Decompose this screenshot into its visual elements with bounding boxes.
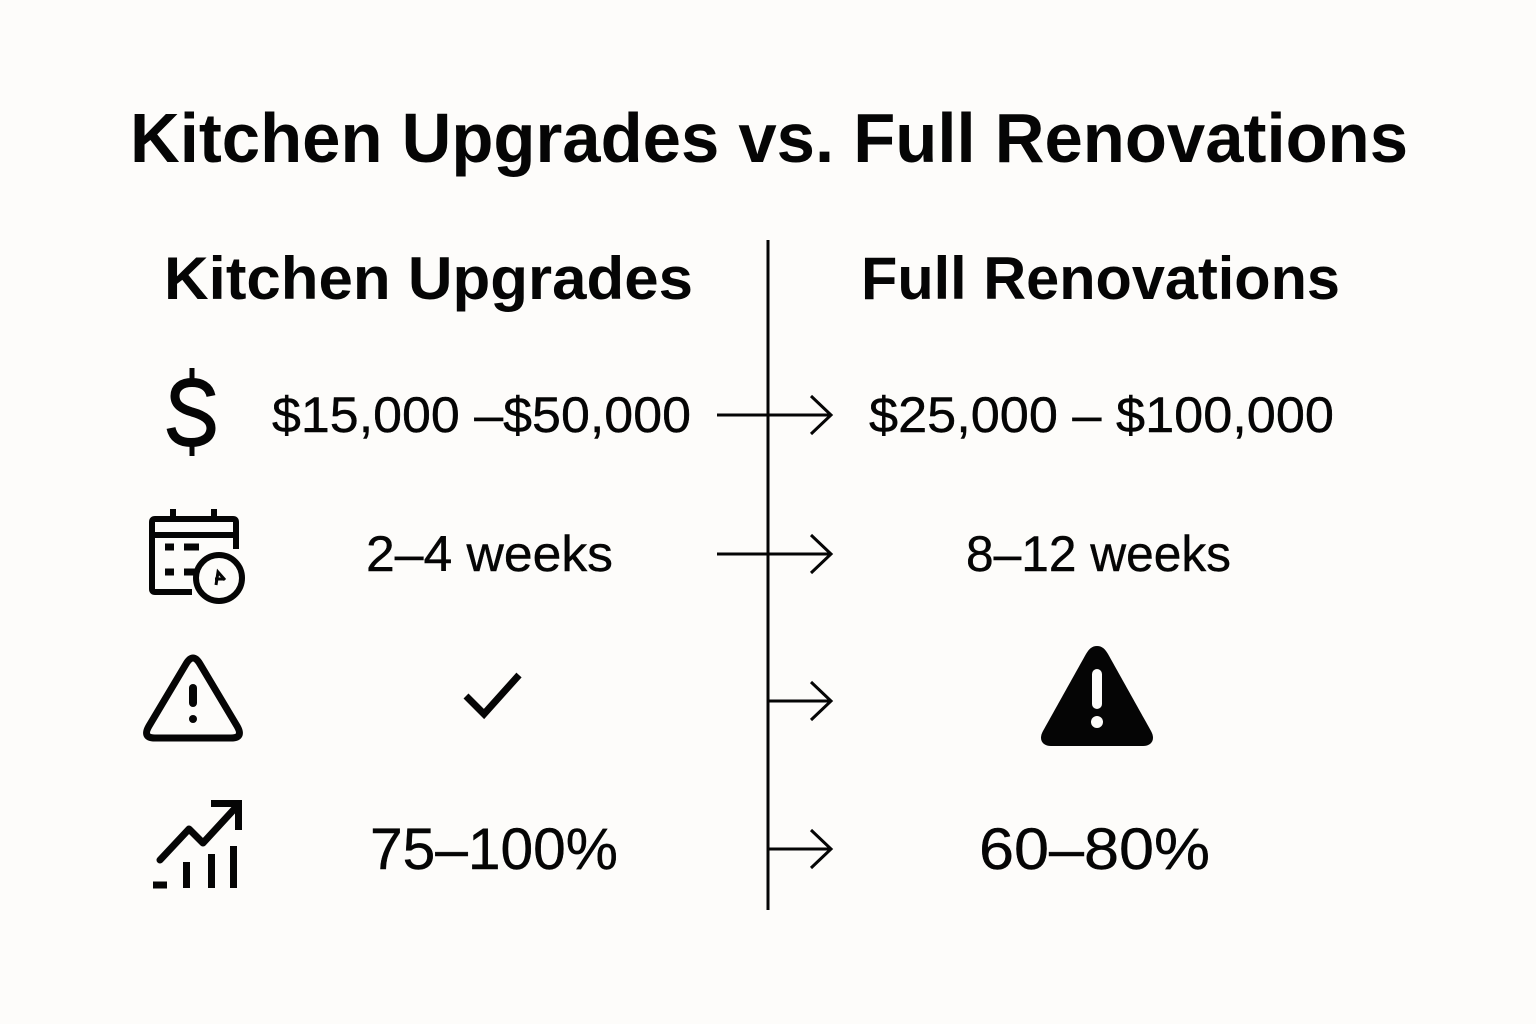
arrow: risk [769, 682, 831, 720]
arrow: cost [717, 396, 831, 434]
icon: check mark [466, 675, 519, 714]
heading: kitchen upgrades: Kitchen Upgrades [164, 245, 693, 312]
arrow: duration [717, 535, 831, 573]
arrow: ROI [769, 830, 831, 868]
icon: dollar sign [171, 368, 211, 456]
icon: growth chart [153, 804, 238, 888]
central divider [766, 240, 770, 910]
ROI: kitchen upgrades: 75–100% [370, 817, 618, 882]
title: Kitchen Upgrades vs. Full Renovations [130, 99, 1408, 177]
icon: warning filled [1041, 646, 1153, 746]
heading: full renovations: Full Renovations [861, 245, 1340, 312]
icon: warning outline [147, 658, 239, 738]
cost: kitchen upgrades: $15,000 –$50,000 [272, 387, 691, 443]
cost: full renovations: $25,000 – $100,000 [869, 387, 1334, 443]
ROI: full renovations: 60–80% [979, 817, 1210, 882]
icon: calendar with clock [152, 509, 242, 601]
duration: full renovations: 8–12 weeks [966, 526, 1231, 582]
duration: kitchen upgrades: 2–4 weeks [366, 526, 613, 582]
